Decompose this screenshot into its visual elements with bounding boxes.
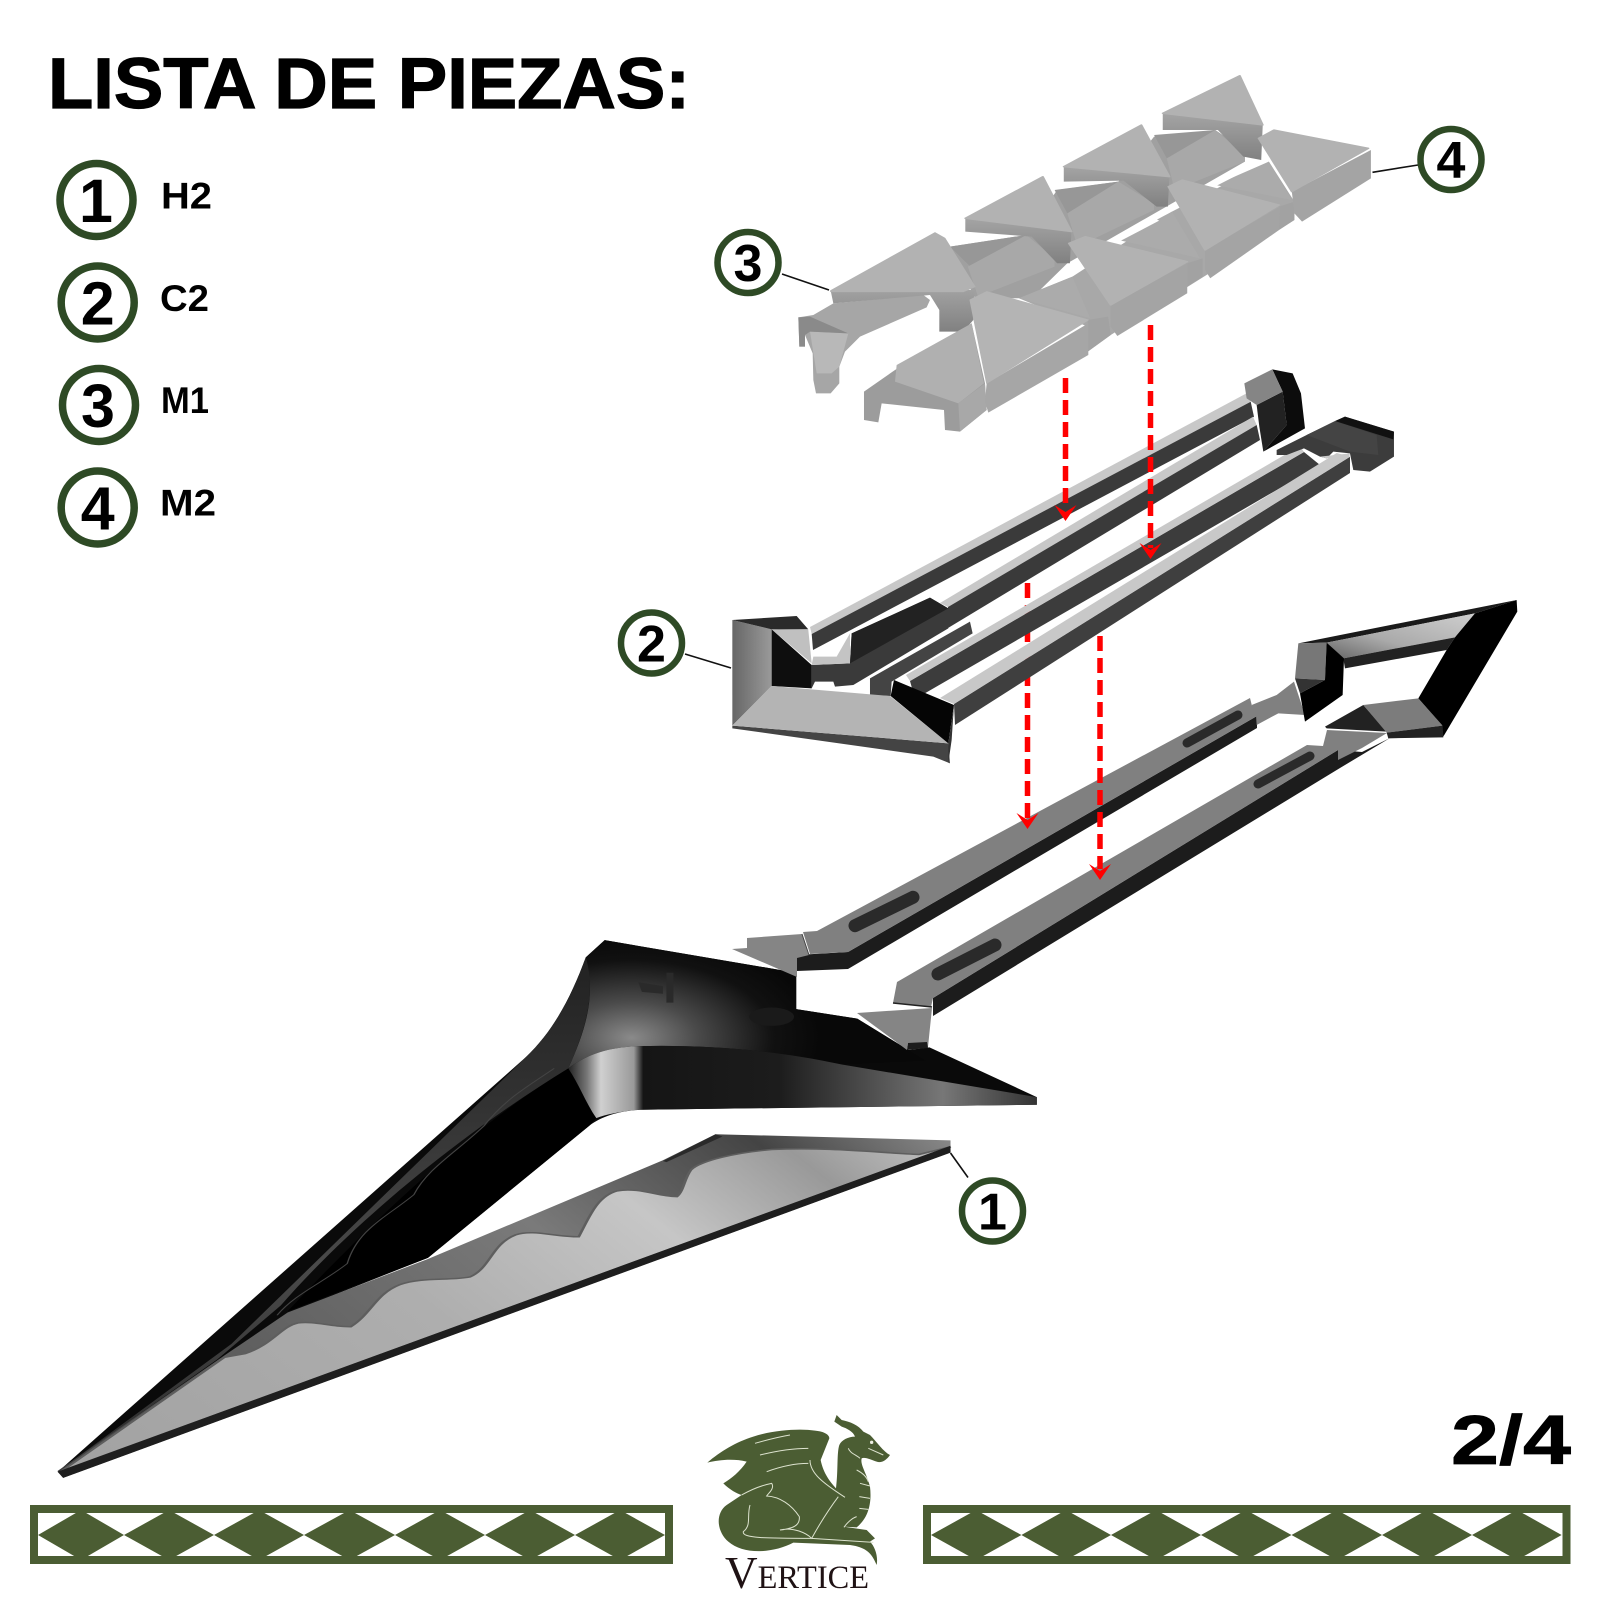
rail 4 [940,453,1350,725]
rail 3 [906,446,1320,699]
legend item 2: C2: 2 [81,270,115,338]
callout 2 [621,612,731,674]
logo: dragon [707,1415,890,1565]
part 1: handle pommel head [1252,600,1517,738]
part 1: blade upper dark piece [60,940,1037,1470]
part 4: front row M2 left end [864,292,1088,432]
logo: wordmark: VERTICE [725,1547,869,1598]
part 4: front row M2 right section [1019,130,1371,352]
legend item 4: M2: M2 [160,482,216,524]
callout 3: 3 [734,235,762,293]
part 1: blade lower grey piece [58,1134,951,1478]
legend item 3: M1: M1 [161,380,209,421]
callout 1 [950,1153,1023,1242]
legend item 2: C2: C2 [160,278,209,319]
arrow: frame to tang right [1089,636,1111,880]
legend item 4: M2 [61,471,216,544]
footer band right [923,1505,1571,1564]
callout 4: 4 [1437,132,1466,190]
rail 2 [940,417,1260,628]
callout 3 [718,232,829,293]
part 3: back row M1 left end [798,233,975,393]
part 1: handle tang upper rail [732,698,1257,977]
page number: 2/4 [1451,1401,1571,1479]
part 3 and 4: grey cap pieces [798,76,1371,432]
callout 1: 1 [978,1184,1007,1242]
part 3: back row M1 right section [950,76,1263,298]
arrow: M2 to frame left [1054,378,1076,521]
top block B [1277,417,1394,472]
part 2: frame base [732,598,973,763]
arrow: frame to tang left (passes behind frame rails) [1016,583,1038,829]
title: LISTA DE PIEZAS: [48,45,690,124]
parts legend [60,164,216,544]
legend item 3: M1: 3 [81,372,115,440]
arrow: M1 to frame right [1140,325,1162,559]
legend item 2: C2 [61,266,209,339]
part 2: frame rails [810,369,1394,725]
callout 4 [1372,129,1482,190]
top block A [1244,369,1305,452]
callout 2: 2 [637,616,666,674]
legend item 4: M2: 4 [81,474,115,542]
legend item 1: H2: H2 [161,176,212,216]
legend item 3: M1 [62,368,209,442]
legend item 1: H2: 1 [79,167,113,235]
part 1: handle tang lower rail [857,730,1390,1050]
legend item 1: H2 [60,164,212,236]
rail 1 [810,393,1254,650]
footer band left [30,1505,673,1564]
